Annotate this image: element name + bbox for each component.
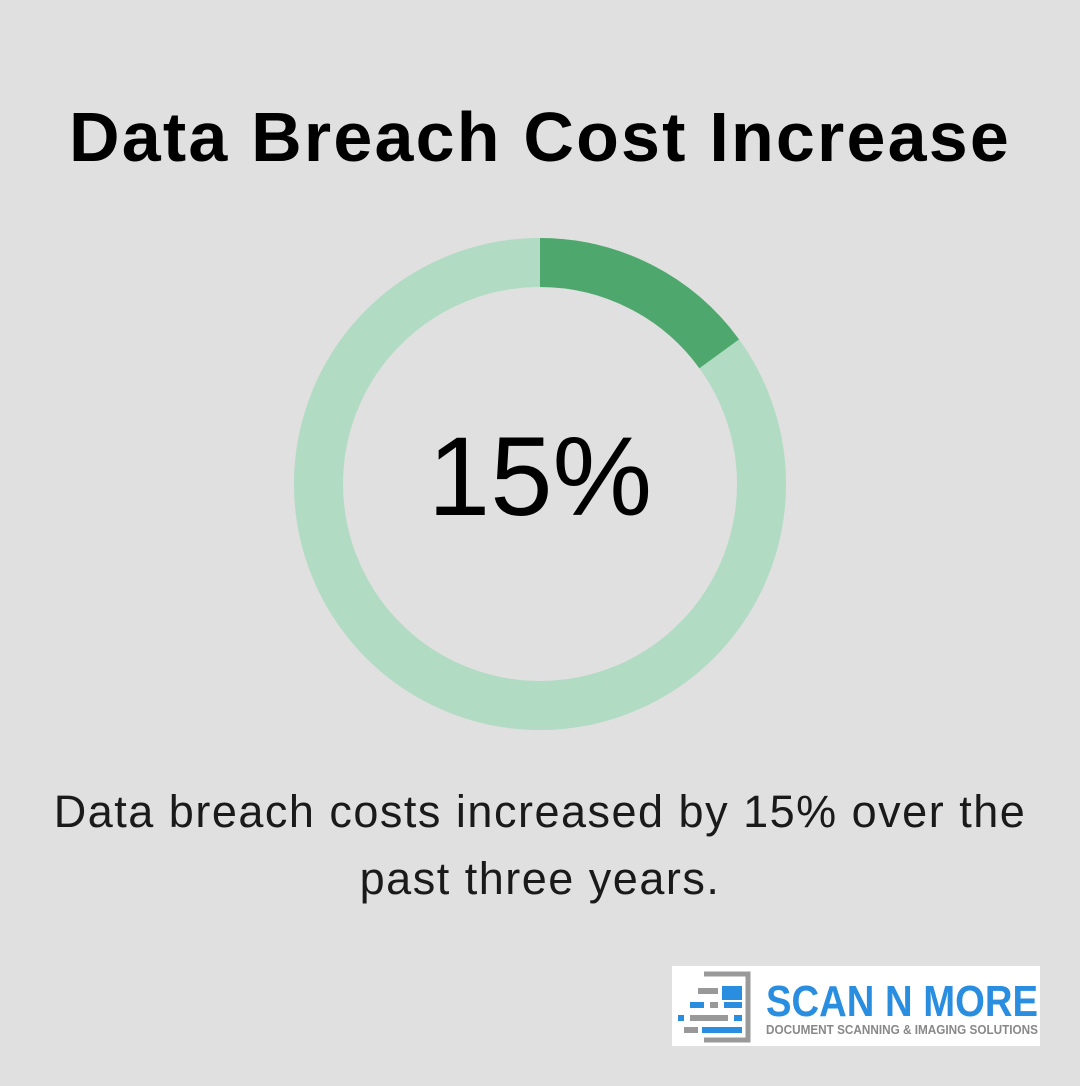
logo xyxy=(672,966,1040,1046)
description text: past three years. xyxy=(360,853,720,904)
title: Data Breach Cost Increase xyxy=(69,98,1011,176)
description text: Data breach costs increased by 15% over the xyxy=(54,786,1026,837)
description text xyxy=(54,786,1026,904)
icon: scanner xyxy=(678,974,748,1040)
percent value: 15% xyxy=(428,414,652,539)
